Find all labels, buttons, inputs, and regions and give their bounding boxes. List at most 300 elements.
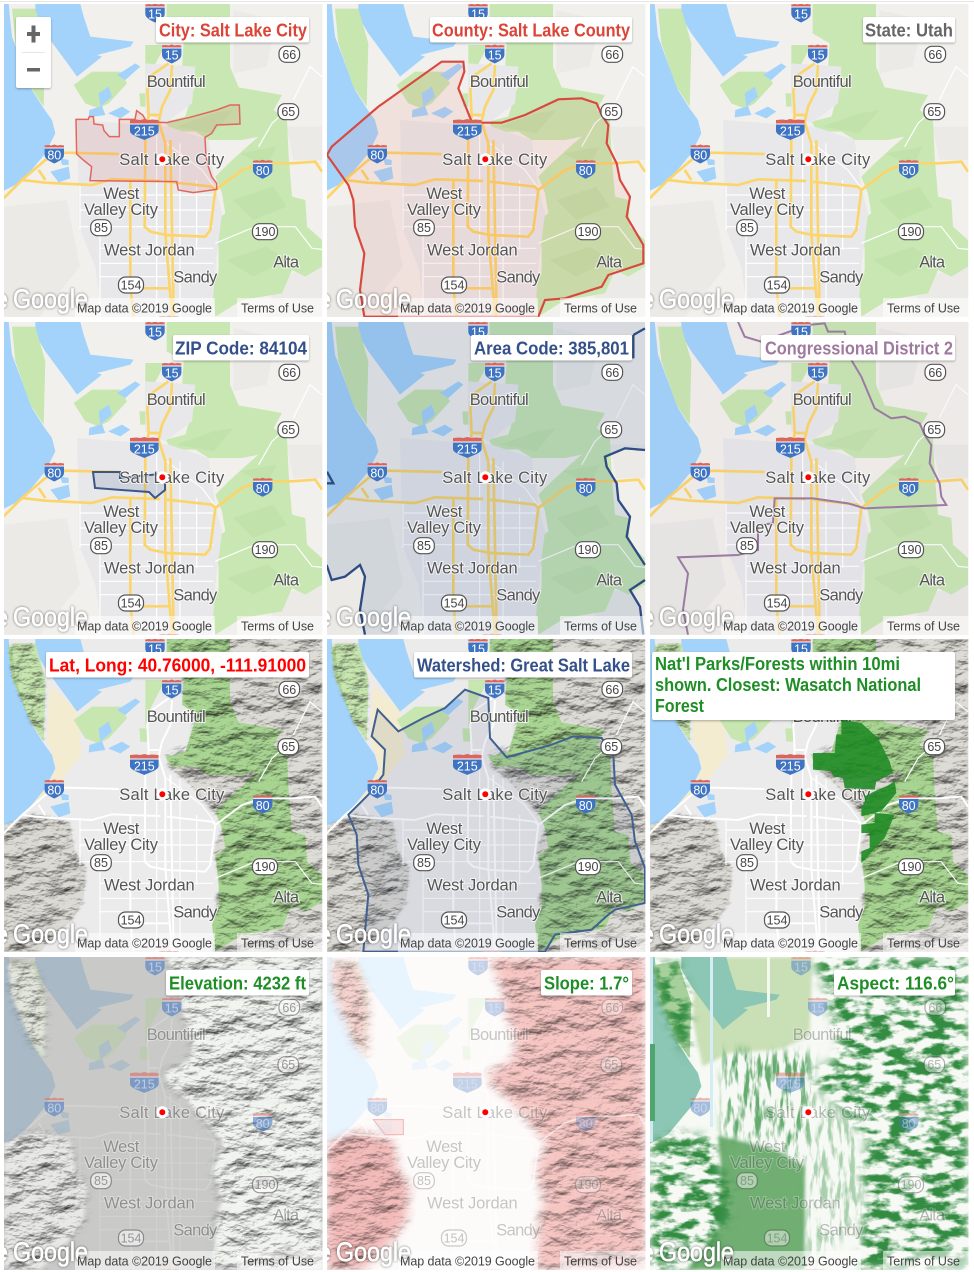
map labels: Alta xyxy=(919,1207,946,1225)
map labels: 215 xyxy=(134,760,155,774)
map labels: West Jordan xyxy=(750,1195,841,1213)
map labels: 65 xyxy=(927,1058,941,1072)
callout: congressional district: Congressional District 2 xyxy=(765,338,953,358)
map labels: Valley City xyxy=(730,201,805,219)
map labels: 154 xyxy=(444,914,464,928)
callout: area code: Area Code: 385,801 xyxy=(474,338,629,358)
map labels: 65 xyxy=(927,423,941,437)
map labels: 85 xyxy=(740,539,754,553)
map labels: West xyxy=(749,820,786,838)
map labels: Bountiful xyxy=(147,1026,206,1044)
map labels: Alta xyxy=(273,572,300,590)
map marker xyxy=(156,788,168,800)
map labels: 66 xyxy=(605,366,619,380)
boundary: congressional district xyxy=(646,318,973,638)
map labels: Sandy xyxy=(496,1222,541,1240)
map attribution: Map data ©2019 Google xyxy=(400,302,535,316)
map labels: 85 xyxy=(94,539,108,553)
map labels: 85 xyxy=(417,1174,431,1188)
map labels: 66 xyxy=(282,366,296,380)
callout: slope: Slope: 1.7° xyxy=(544,974,629,994)
map labels xyxy=(693,642,946,928)
map labels: 15 xyxy=(471,326,485,340)
map labels: West xyxy=(103,1138,140,1156)
map labels: 80 xyxy=(47,466,61,480)
map labels: Sandy xyxy=(173,587,218,605)
panel: elevation xyxy=(0,957,322,1270)
map labels: 65 xyxy=(604,740,618,754)
map attribution: e xyxy=(316,919,331,949)
panel: county xyxy=(316,4,646,317)
map labels: 65 xyxy=(281,740,295,754)
map labels: Bountiful xyxy=(793,708,852,726)
map attribution: Google xyxy=(336,602,411,632)
panel: congressional district xyxy=(639,322,968,635)
map labels: 65 xyxy=(281,423,295,437)
map labels: 85 xyxy=(417,856,431,870)
map labels: 66 xyxy=(928,1001,942,1015)
callout: national forests: Nat'l Parks/Forests within 10mi xyxy=(655,654,900,674)
map labels: 190 xyxy=(901,543,921,557)
panel: zip code xyxy=(0,322,322,635)
map attribution: Google xyxy=(13,602,88,632)
map labels: 66 xyxy=(605,48,619,62)
map labels: Salt Lake City xyxy=(765,786,871,804)
map labels: 215 xyxy=(457,760,478,774)
map labels: West Jordan xyxy=(750,877,841,895)
map labels: 154 xyxy=(444,596,464,610)
callout: watershed: Watershed: Great Salt Lake xyxy=(417,656,630,676)
map labels: 15 xyxy=(165,684,179,698)
map labels: Bountiful xyxy=(470,391,529,409)
map labels: Salt Lake City xyxy=(119,786,225,804)
map attribution: Terms of Use xyxy=(241,302,314,316)
map labels: Valley City xyxy=(407,836,482,854)
map labels: 15 xyxy=(165,1002,179,1016)
map labels: 154 xyxy=(121,278,141,292)
callout: national forests: shown. Closest: Wasatch National xyxy=(655,675,921,695)
callout: national forests: Forest xyxy=(655,696,704,716)
map labels: West xyxy=(103,503,140,521)
map labels: 15 xyxy=(811,1002,825,1016)
map labels: 66 xyxy=(282,683,296,697)
map labels: 190 xyxy=(578,543,598,557)
map labels: Salt Lake City xyxy=(119,151,225,169)
map attribution xyxy=(639,1237,969,1270)
map marker xyxy=(156,153,168,165)
map labels: 85 xyxy=(94,221,108,235)
boundary: area code xyxy=(327,322,645,635)
map labels: 80 xyxy=(256,482,270,496)
map labels: Sandy xyxy=(819,269,864,287)
map labels: West Jordan xyxy=(427,1195,518,1213)
map labels: 80 xyxy=(693,784,707,798)
map marker xyxy=(156,471,168,483)
map attribution xyxy=(0,602,323,635)
map attribution: Terms of Use xyxy=(564,302,637,316)
map labels xyxy=(47,960,300,1246)
map attribution: Map data ©2019 Google xyxy=(723,936,858,950)
map attribution: Google xyxy=(336,1237,411,1267)
map labels: 66 xyxy=(282,48,296,62)
map labels: Valley City xyxy=(84,519,159,537)
map labels: 85 xyxy=(740,1174,754,1188)
boundary: city xyxy=(76,105,240,193)
map labels: 190 xyxy=(255,543,275,557)
map labels xyxy=(693,326,946,610)
map labels: 80 xyxy=(902,1117,916,1131)
callout: national forests xyxy=(652,652,955,720)
map labels: 80 xyxy=(579,482,593,496)
map labels: Bountiful xyxy=(147,391,206,409)
map marker xyxy=(802,788,814,800)
map marker xyxy=(156,1106,168,1118)
map labels: 80 xyxy=(902,799,916,813)
map attribution: Map data ©2019 Google xyxy=(77,620,212,634)
map labels: Valley City xyxy=(407,519,482,537)
map attribution: Terms of Use xyxy=(564,936,637,950)
map labels: 215 xyxy=(457,124,478,138)
map labels: 80 xyxy=(902,164,916,178)
map marker xyxy=(802,471,814,483)
map labels: Salt Lake City xyxy=(765,151,871,169)
map labels: 15 xyxy=(811,366,825,380)
map labels: 15 xyxy=(794,960,808,974)
map labels: 80 xyxy=(579,164,593,178)
map attribution: Google xyxy=(13,1237,88,1267)
map labels: 80 xyxy=(370,466,384,480)
map attribution: Google xyxy=(659,919,734,949)
map attribution xyxy=(0,284,323,317)
map labels: 85 xyxy=(740,856,754,870)
map labels: 80 xyxy=(47,1102,61,1116)
map labels: 15 xyxy=(811,684,825,698)
map labels: 65 xyxy=(281,1058,295,1072)
map attribution: Map data ©2019 Google xyxy=(723,1254,858,1268)
map attribution: Map data ©2019 Google xyxy=(400,936,535,950)
national forest polygons xyxy=(813,720,896,863)
map labels: 80 xyxy=(256,1117,270,1131)
map labels: Sandy xyxy=(496,269,541,287)
map labels: 154 xyxy=(121,596,141,610)
map labels: Alta xyxy=(596,254,623,272)
map labels: Salt Lake City xyxy=(442,786,548,804)
callout: latitude longitude: Lat, Long: 40.76000, -111.91000 xyxy=(49,656,306,676)
map attribution: e xyxy=(639,284,654,314)
map labels xyxy=(370,326,623,610)
map labels: 215 xyxy=(780,760,801,774)
map labels: 66 xyxy=(928,48,942,62)
panel: aspect xyxy=(639,957,968,1270)
map labels: Sandy xyxy=(496,904,541,922)
boundary: zip code xyxy=(93,472,165,498)
map labels: 15 xyxy=(488,1002,502,1016)
map labels: 215 xyxy=(134,124,155,138)
map attribution xyxy=(316,602,646,635)
map labels: 80 xyxy=(579,1117,593,1131)
map labels: 80 xyxy=(693,1102,707,1116)
map attribution xyxy=(639,602,969,635)
map attribution: e xyxy=(316,602,331,632)
map labels: 15 xyxy=(148,326,162,340)
map labels: 80 xyxy=(579,799,593,813)
panel: watershed xyxy=(316,639,646,952)
map labels: Alta xyxy=(919,889,946,907)
map labels: West xyxy=(426,820,463,838)
map labels: Valley City xyxy=(84,201,159,219)
map marker xyxy=(479,471,491,483)
map attribution: Map data ©2019 Google xyxy=(77,1254,212,1268)
map labels: 215 xyxy=(134,442,155,456)
map attribution: Map data ©2019 Google xyxy=(723,302,858,316)
map labels: 190 xyxy=(901,1178,921,1192)
callout: aspect: Aspect: 116.6° xyxy=(837,974,954,994)
map labels: 80 xyxy=(693,466,707,480)
map labels: Salt Lake City xyxy=(442,1104,548,1122)
map attribution: e xyxy=(316,284,331,314)
map labels: 15 xyxy=(488,684,502,698)
map attribution xyxy=(316,1237,646,1270)
map labels: West xyxy=(749,503,786,521)
map attribution xyxy=(316,284,646,317)
map labels xyxy=(370,642,623,928)
map labels: 80 xyxy=(256,164,270,178)
map labels: Alta xyxy=(919,254,946,272)
map labels: 215 xyxy=(780,1078,801,1092)
map labels: 66 xyxy=(605,1001,619,1015)
map labels xyxy=(47,326,300,610)
map labels: 15 xyxy=(488,366,502,380)
map labels: West xyxy=(426,503,463,521)
map attribution: Google xyxy=(13,284,88,314)
map labels: West Jordan xyxy=(750,242,841,260)
map attribution xyxy=(0,919,323,952)
map labels: 215 xyxy=(780,442,801,456)
map attribution: Terms of Use xyxy=(564,1254,637,1268)
map labels: 65 xyxy=(927,740,941,754)
map labels xyxy=(47,642,300,928)
map attribution: Map data ©2019 Google xyxy=(723,620,858,634)
map attribution: Google xyxy=(659,602,734,632)
map labels: West xyxy=(103,820,140,838)
map labels: 154 xyxy=(121,1232,141,1246)
map labels: 154 xyxy=(767,278,787,292)
map labels: Alta xyxy=(273,254,300,272)
map labels: 215 xyxy=(134,1078,155,1092)
map labels: Sandy xyxy=(173,1222,218,1240)
map labels: West xyxy=(749,1138,786,1156)
map labels: West Jordan xyxy=(427,560,518,578)
map labels: West Jordan xyxy=(104,242,195,260)
map labels: Valley City xyxy=(730,519,805,537)
map labels: 190 xyxy=(901,860,921,874)
map labels: 15 xyxy=(471,642,485,656)
map labels: Bountiful xyxy=(793,73,852,91)
panel: national forests xyxy=(639,639,968,952)
map labels: 65 xyxy=(281,105,295,119)
panel: area code xyxy=(316,322,646,635)
map labels: Alta xyxy=(596,1207,623,1225)
map labels: 154 xyxy=(767,914,787,928)
map labels: 80 xyxy=(47,148,61,162)
map labels: 85 xyxy=(417,221,431,235)
map labels: Alta xyxy=(596,572,623,590)
map marker xyxy=(479,153,491,165)
map marker xyxy=(802,153,814,165)
map labels: 15 xyxy=(148,960,162,974)
map attribution: Map data ©2019 Google xyxy=(77,302,212,316)
map labels: 80 xyxy=(370,148,384,162)
map attribution: Terms of Use xyxy=(564,620,637,634)
map labels: Sandy xyxy=(819,587,864,605)
map labels: Valley City xyxy=(730,1154,805,1172)
map labels: 66 xyxy=(928,683,942,697)
map marker xyxy=(802,1106,814,1118)
panel: state xyxy=(639,4,968,317)
map attribution: Terms of Use xyxy=(887,1254,960,1268)
map labels: 80 xyxy=(256,799,270,813)
map labels: West Jordan xyxy=(427,242,518,260)
callout: elevation: Elevation: 4232 ft xyxy=(169,974,306,994)
map labels: Bountiful xyxy=(147,73,206,91)
map labels: 65 xyxy=(604,105,618,119)
boundary: watershed xyxy=(348,690,645,952)
callout: state: State: Utah xyxy=(865,20,953,40)
map labels: 66 xyxy=(605,683,619,697)
map attribution: Terms of Use xyxy=(887,936,960,950)
map labels: 15 xyxy=(165,366,179,380)
zoom controls xyxy=(16,17,51,88)
map labels: West Jordan xyxy=(104,560,195,578)
map attribution: e xyxy=(639,1237,654,1267)
map labels: Valley City xyxy=(730,836,805,854)
map attribution xyxy=(639,919,969,952)
map attribution xyxy=(0,1237,323,1270)
map marker xyxy=(479,1106,491,1118)
panel: city xyxy=(0,4,322,317)
map labels: 154 xyxy=(767,1232,787,1246)
map labels: 190 xyxy=(578,860,598,874)
map labels: Alta xyxy=(273,889,300,907)
map labels: Alta xyxy=(596,889,623,907)
map labels: West xyxy=(103,185,140,203)
map labels: 65 xyxy=(604,1058,618,1072)
map attribution: Terms of Use xyxy=(887,620,960,634)
map labels: 66 xyxy=(928,366,942,380)
callout: city: City: Salt Lake City xyxy=(159,20,307,40)
map attribution: e xyxy=(316,1237,331,1267)
map labels: 66 xyxy=(282,1001,296,1015)
map labels: Valley City xyxy=(84,1154,159,1172)
map labels: 15 xyxy=(488,48,502,62)
map labels: Sandy xyxy=(819,904,864,922)
map labels: 80 xyxy=(693,148,707,162)
map labels: 154 xyxy=(444,278,464,292)
map labels: 215 xyxy=(780,124,801,138)
map labels: 80 xyxy=(47,784,61,798)
map labels: 190 xyxy=(901,225,921,239)
map labels: 190 xyxy=(255,860,275,874)
map labels: West xyxy=(426,185,463,203)
map attribution xyxy=(639,284,969,317)
panel: slope xyxy=(316,957,646,1270)
map labels: 15 xyxy=(165,48,179,62)
map attribution: Map data ©2019 Google xyxy=(77,936,212,950)
map attribution: e xyxy=(639,919,654,949)
map labels: West Jordan xyxy=(104,1195,195,1213)
map labels: 15 xyxy=(794,326,808,340)
map labels: Bountiful xyxy=(147,708,206,726)
map labels: Alta xyxy=(273,1207,300,1225)
map labels: Bountiful xyxy=(793,391,852,409)
map attribution: Map data ©2019 Google xyxy=(400,1254,535,1268)
map labels: 85 xyxy=(94,856,108,870)
map labels: 15 xyxy=(794,642,808,656)
map labels: Salt Lake City xyxy=(119,1104,225,1122)
map labels: 15 xyxy=(471,8,485,22)
map labels: Valley City xyxy=(407,201,482,219)
map labels xyxy=(47,8,300,292)
map labels: 190 xyxy=(255,1178,275,1192)
map marker xyxy=(479,788,491,800)
map labels: West Jordan xyxy=(104,877,195,895)
map attribution: Google xyxy=(13,919,88,949)
map attribution: Terms of Use xyxy=(241,620,314,634)
map labels xyxy=(370,8,623,292)
map labels: 154 xyxy=(444,1232,464,1246)
map labels: Valley City xyxy=(407,1154,482,1172)
map labels: Salt Lake City xyxy=(765,1104,871,1122)
map labels: 215 xyxy=(457,1078,478,1092)
map labels: Sandy xyxy=(173,904,218,922)
map labels xyxy=(370,960,623,1246)
map labels: 15 xyxy=(794,8,808,22)
map labels: Salt Lake City xyxy=(442,469,548,487)
map labels: 190 xyxy=(578,225,598,239)
map attribution: e xyxy=(639,602,654,632)
map labels: Bountiful xyxy=(470,708,529,726)
map labels: Salt Lake City xyxy=(119,469,225,487)
map labels: Salt Lake City xyxy=(765,469,871,487)
map labels: Bountiful xyxy=(470,73,529,91)
map labels: 80 xyxy=(370,1102,384,1116)
map labels: 80 xyxy=(370,784,384,798)
map labels: 190 xyxy=(578,1178,598,1192)
map labels: Salt Lake City xyxy=(442,151,548,169)
map labels: 154 xyxy=(767,596,787,610)
map labels: Alta xyxy=(919,572,946,590)
map labels: Bountiful xyxy=(793,1026,852,1044)
map labels: 15 xyxy=(471,960,485,974)
map labels: Sandy xyxy=(819,1222,864,1240)
map labels: 215 xyxy=(457,442,478,456)
map attribution: Google xyxy=(659,284,734,314)
map labels: 65 xyxy=(927,105,941,119)
map labels: 15 xyxy=(811,48,825,62)
map labels: 85 xyxy=(417,539,431,553)
map attribution: Google xyxy=(336,919,411,949)
map labels xyxy=(693,960,946,1246)
map labels: 190 xyxy=(255,225,275,239)
map labels: 85 xyxy=(94,1174,108,1188)
map labels: West Jordan xyxy=(427,877,518,895)
map attribution: Map data ©2019 Google xyxy=(400,620,535,634)
map labels: 85 xyxy=(740,221,754,235)
map attribution: Google xyxy=(336,284,411,314)
map attribution: Terms of Use xyxy=(887,302,960,316)
map attribution: Terms of Use xyxy=(241,1254,314,1268)
map labels: 80 xyxy=(902,482,916,496)
